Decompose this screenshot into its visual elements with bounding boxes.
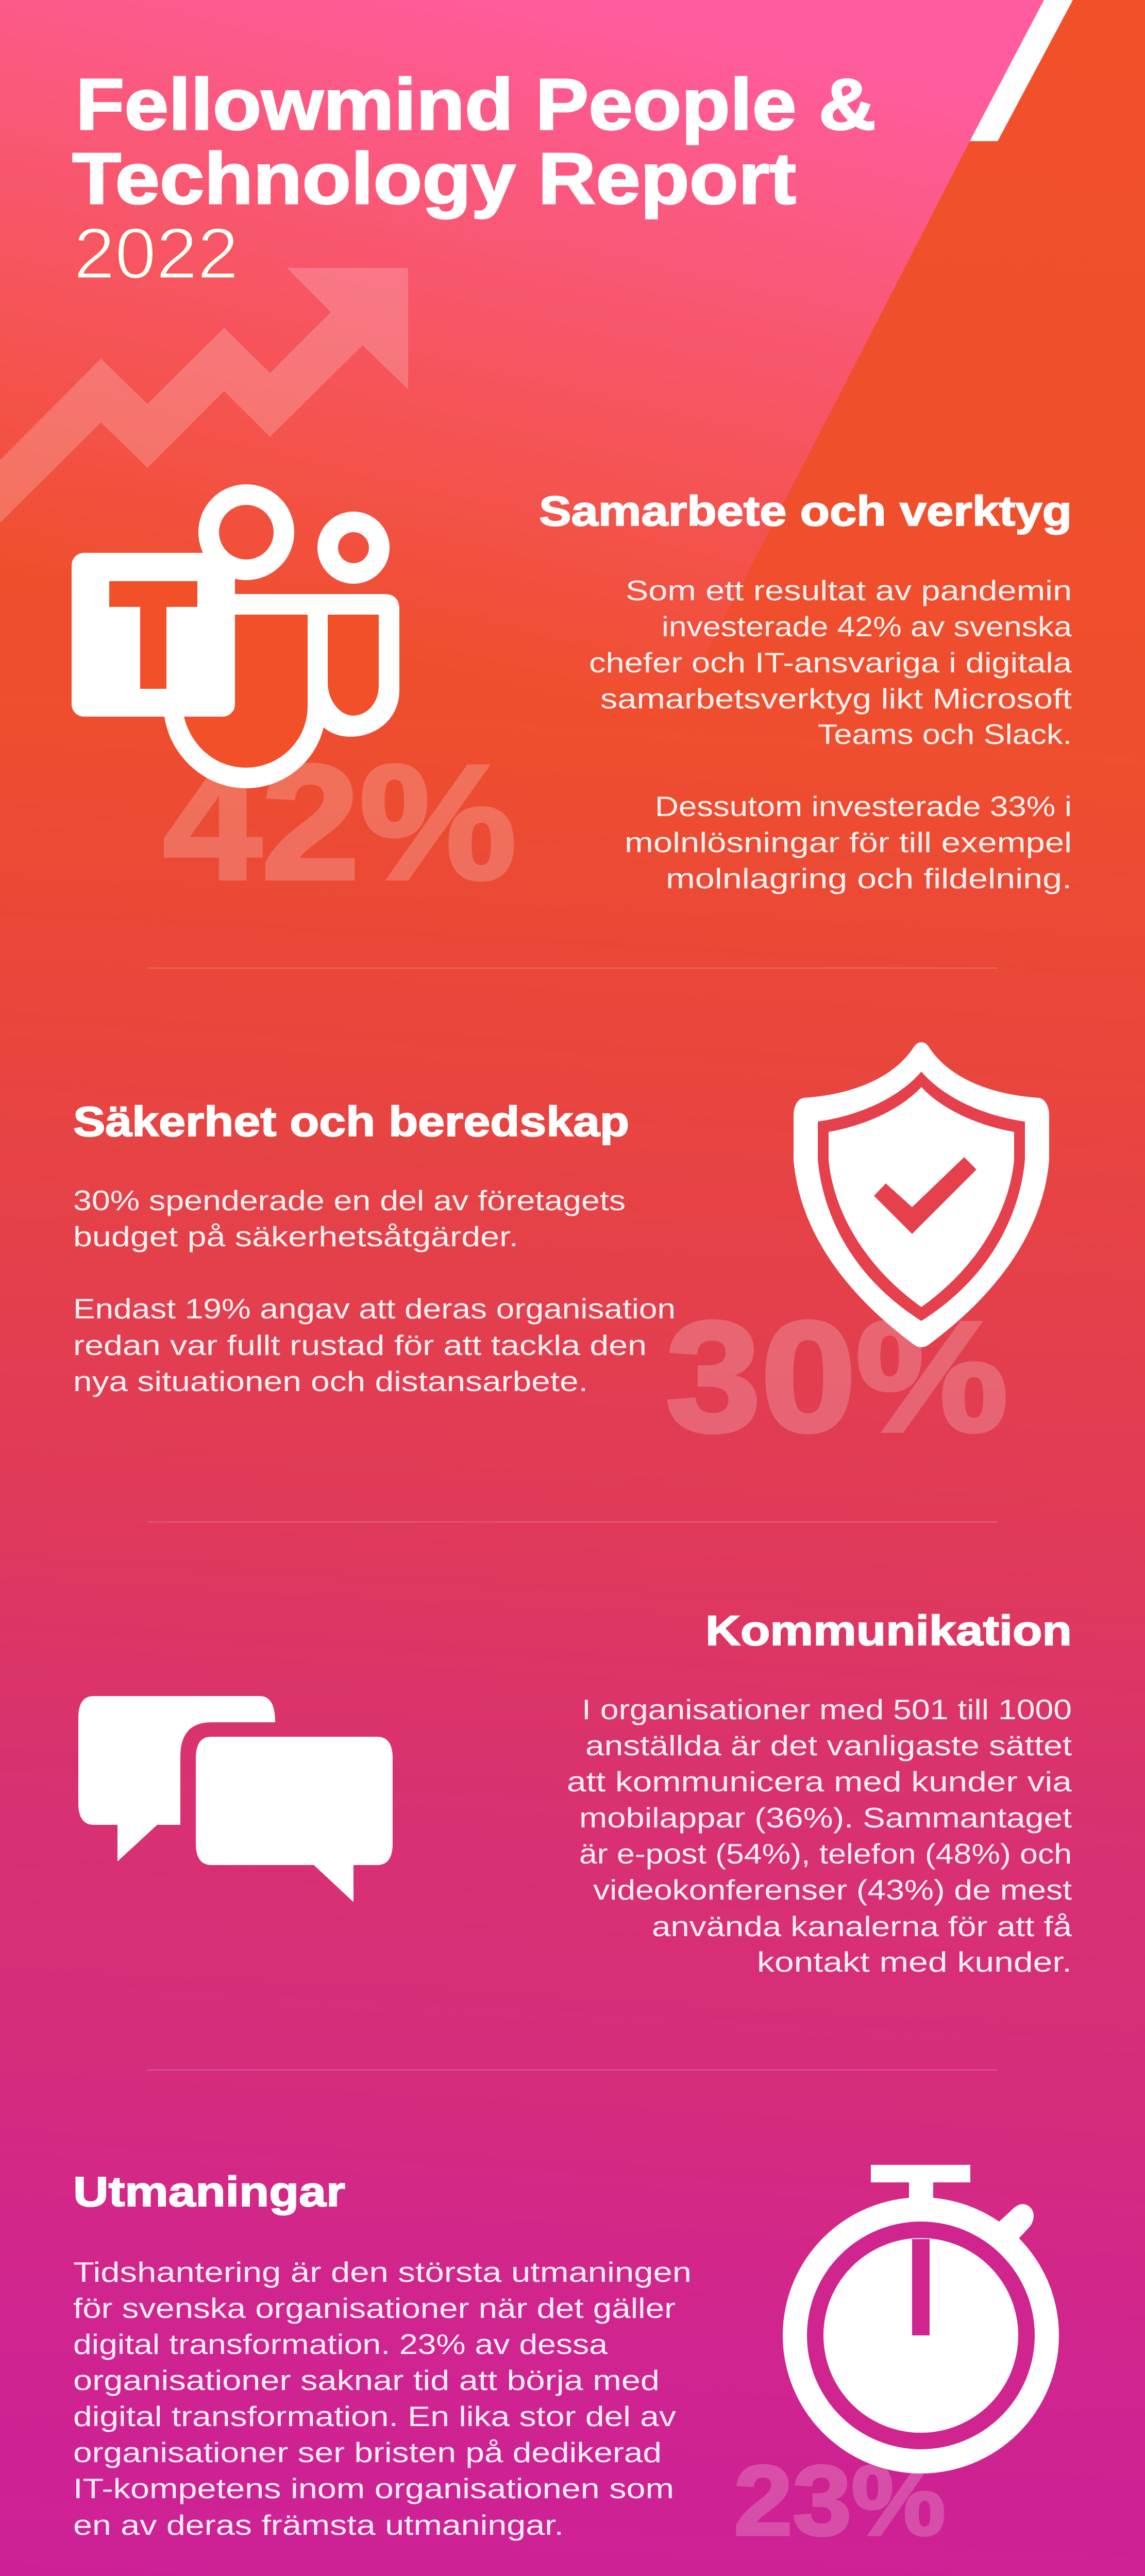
header: pink diagonal panel [0, 0, 1044, 824]
body text: Som ett resultat av pandemin [626, 574, 1072, 606]
title: Technology Report [72, 138, 796, 219]
body text: chefer och IT-ansvariga i digitala [589, 647, 1072, 679]
body text: Endast 19% angav att deras organisation [73, 1293, 676, 1325]
icon: stopwatch [783, 2165, 1059, 2473]
body text: anställda är det vanligaste sättet [585, 1730, 1072, 1761]
body text: budget på säkerhetsåtgärder. [73, 1221, 518, 1252]
header: white diagonal stripe [970, 0, 1073, 141]
icon: shield with check [794, 1042, 1049, 1347]
body text: organisationer ser bristen på dedikerad [73, 2436, 662, 2468]
big percentage 23%: 23% [734, 2445, 946, 2556]
panel: Utmaningar [73, 2165, 1059, 2556]
panel: Kommunikation [78, 1607, 1072, 1978]
body text: molnlösningar för till exempel [625, 826, 1072, 858]
body text: organisationer saknar tid att börja med [73, 2364, 660, 2396]
icon: Teams logo [72, 495, 399, 788]
body text [589, 574, 1072, 894]
header: rising arrow [0, 268, 408, 523]
body text: Tidshantering är den största utmaningen [73, 2256, 692, 2288]
body text: investerade 42% av svenska [662, 611, 1072, 642]
body text: använda kanalerna för att få [652, 1910, 1072, 1942]
body text: digital transformation. En lika stor del av [73, 2400, 677, 2432]
body text: en av deras främsta utmaningar. [73, 2509, 564, 2541]
body text: I organisationer med 501 till 1000 [582, 1693, 1072, 1725]
heading: Kommunikation [705, 1607, 1072, 1654]
body text: videokonferenser (43%) de mest [593, 1874, 1072, 1906]
body text: Teams och Slack. [818, 718, 1072, 750]
body text: kontakt med kunder. [757, 1946, 1072, 1978]
body text: att kommunicera med kunder via [567, 1766, 1072, 1798]
body text: molnlagring och fildelning. [666, 862, 1072, 894]
heading: Utmaningar [73, 2168, 345, 2215]
body text: Dessutom investerade 33% i [655, 790, 1072, 822]
title: Fellowmind People & [76, 63, 876, 145]
body text [567, 1693, 1072, 1978]
body text: samarbetsverktyg likt Microsoft [600, 683, 1072, 715]
big percentage 30%: 30% [666, 1290, 1008, 1464]
body text: nya situationen och distansarbete. [73, 1365, 588, 1397]
heading: Samarbete och verktyg [539, 488, 1072, 535]
body text: 30% spenderade en del av företagets [73, 1184, 626, 1216]
big percentage 42%: 42% [163, 731, 516, 913]
panel: Säkerhet och beredskap [73, 1042, 1049, 1464]
body text: IT-kompetens inom organisationen som [73, 2472, 674, 2504]
body text: mobilappar (36%). Sammantaget [579, 1802, 1072, 1834]
body text: är e-post (54%), telefon (48%) och [579, 1838, 1072, 1870]
body text: digital transformation. 23% av dessa [73, 2328, 608, 2360]
heading: Säkerhet och beredskap [73, 1098, 629, 1145]
title: 2022 [74, 213, 239, 294]
body text [73, 1184, 676, 1397]
panel: Samarbete och verktyg [72, 488, 1072, 913]
title [72, 63, 876, 294]
body text: redan var fullt rustad för att tackla den [73, 1329, 647, 1361]
icon: speech bubbles [78, 1696, 393, 1902]
body text: för svenska organisationer när det gäller [73, 2292, 676, 2324]
body text [73, 2256, 692, 2541]
